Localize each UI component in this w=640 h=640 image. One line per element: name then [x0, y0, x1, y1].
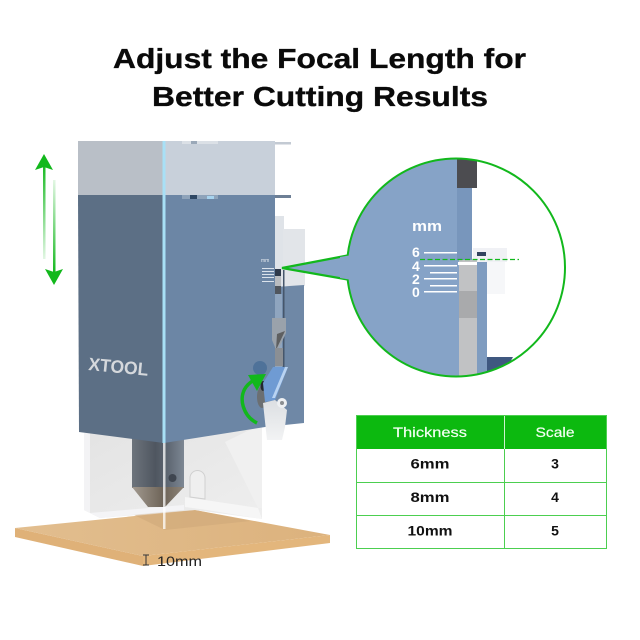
- row 8mm: 8mm: [410, 489, 450, 505]
- magnified scale: [412, 218, 457, 300]
- row 6mm: 6mm: [410, 456, 450, 472]
- magnified scale: mm: [412, 218, 442, 235]
- magnified circle: [347, 158, 565, 376]
- 10mm label: [143, 553, 202, 569]
- title: [113, 43, 526, 112]
- pointer join cover: [340, 255, 352, 280]
- circle outline: [347, 158, 565, 376]
- row 6mm: [410, 456, 559, 472]
- small scale on body: mm: [261, 258, 269, 264]
- table: thickness and scale: [356, 415, 607, 549]
- side module behind housing: [275, 216, 305, 426]
- XTOOL logo: XTOOL: [88, 354, 149, 380]
- top translucent housing: [78, 141, 291, 195]
- icon: curved rotation arrow: [242, 374, 266, 423]
- row 6mm: 3: [551, 456, 559, 472]
- table header: [356, 415, 607, 449]
- table header: Scale: [536, 424, 575, 440]
- table grid: [356, 416, 606, 549]
- laser line: [163, 440, 166, 529]
- magnified scale: 2: [412, 271, 420, 287]
- row 8mm: 4: [551, 489, 559, 505]
- nozzle: [132, 438, 184, 507]
- icon: up and down arrows: [35, 154, 63, 285]
- title: Better Cutting Results: [152, 81, 488, 112]
- magnified scale: 0: [412, 284, 420, 300]
- zoom lens callout: [282, 150, 565, 390]
- row 10mm: [408, 522, 559, 538]
- callout pointer: [282, 255, 350, 280]
- wooden board: [15, 510, 330, 566]
- row 10mm: 10mm: [408, 522, 452, 538]
- table header: Thickness: [393, 424, 467, 440]
- small scale on body: [261, 258, 281, 294]
- 10mm label: 10mm: [157, 553, 202, 569]
- row 10mm: 5: [551, 522, 559, 538]
- magnified scale: 6: [412, 244, 420, 260]
- row 8mm: [410, 489, 559, 505]
- adjustment lever: [253, 361, 288, 440]
- magnified contents: [348, 160, 513, 376]
- focus slider rod: [272, 270, 286, 370]
- main blue body: [78, 141, 291, 443]
- dashed focus line: [420, 258, 519, 260]
- transparent guard: [84, 424, 262, 519]
- magnified scale: 4: [412, 258, 420, 274]
- title: Adjust the Focal Length for: [113, 43, 526, 74]
